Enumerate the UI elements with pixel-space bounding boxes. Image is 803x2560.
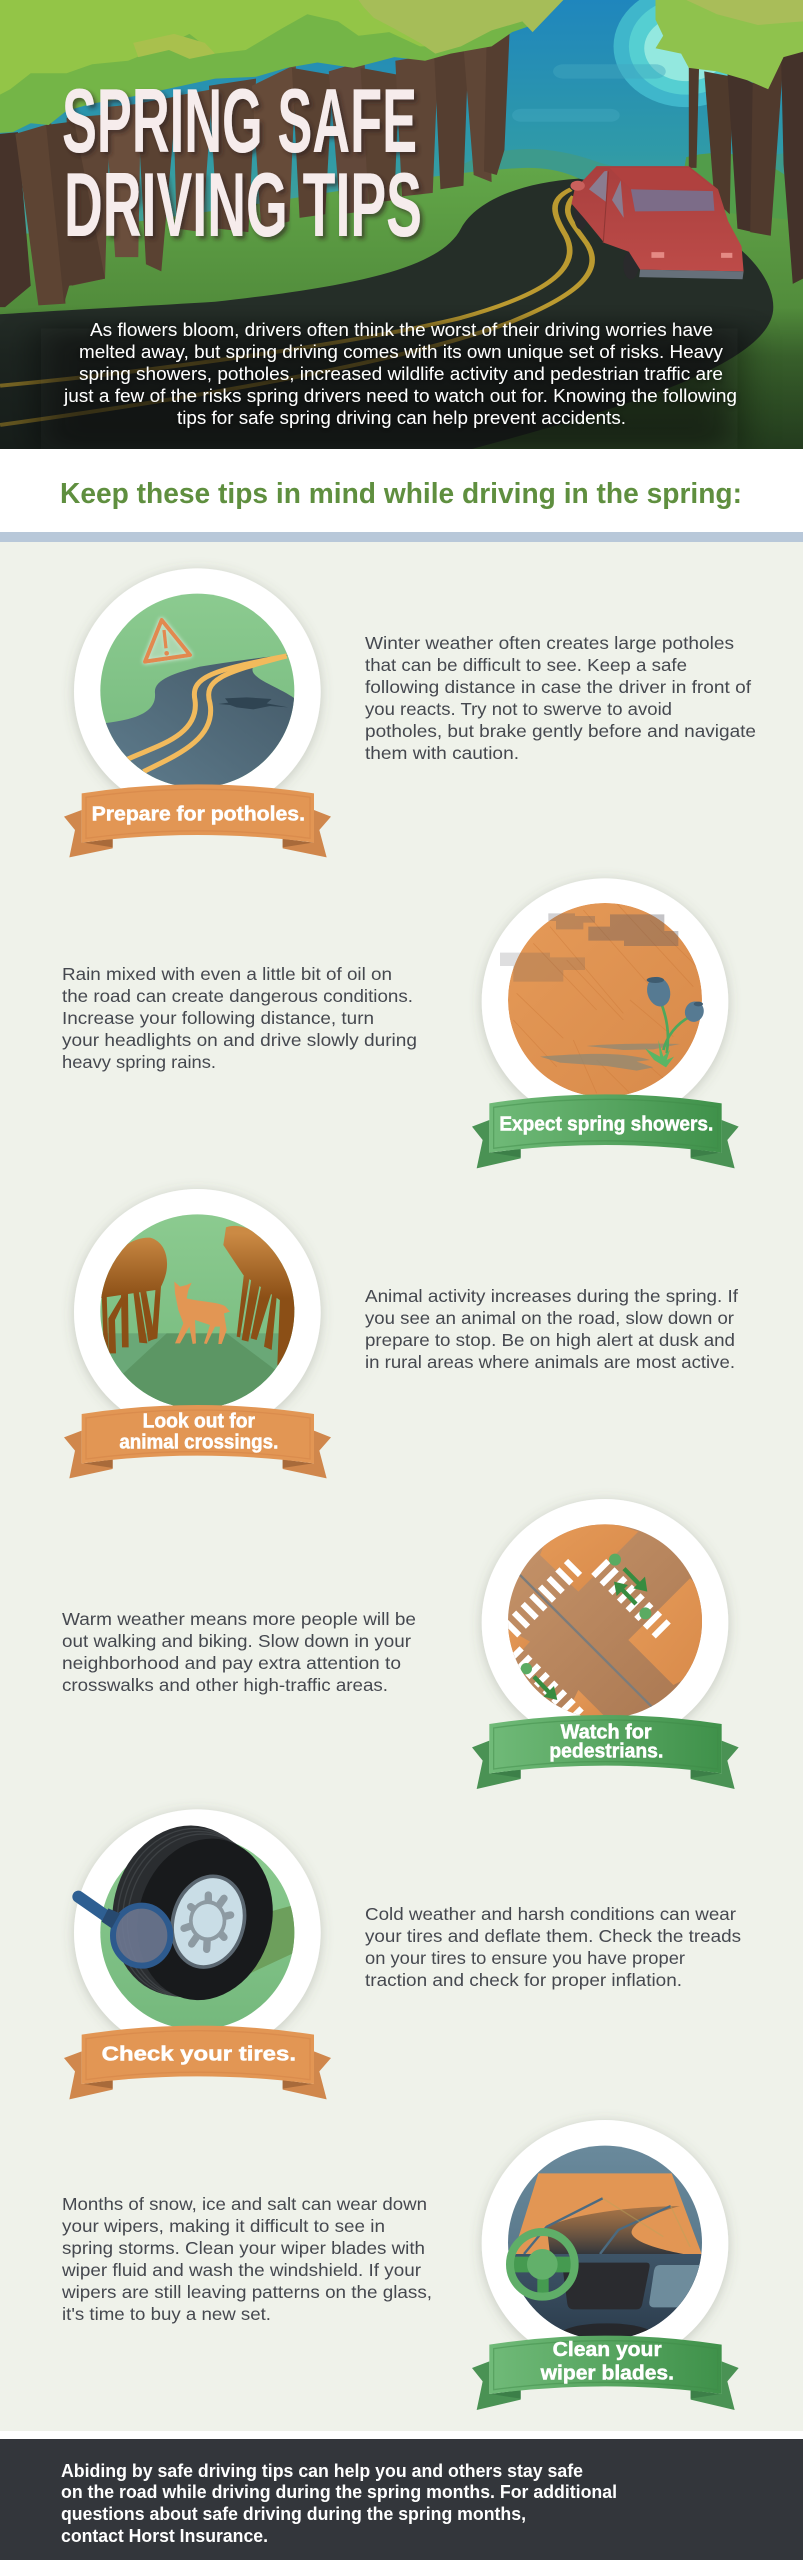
road scene bbox=[97, 590, 300, 793]
tip 6 text: wiper fluid and wash the windshield. If your bbox=[61, 2260, 421, 2280]
rear window bbox=[631, 189, 714, 211]
footer text bbox=[61, 2461, 617, 2546]
right tree bbox=[223, 1226, 298, 1368]
tip 4 text: crosswalks and other high-traffic areas. bbox=[62, 1675, 388, 1695]
intro paragraph: As flowers bloom, drivers often think the worst of their driving worries have bbox=[90, 320, 713, 340]
vent panel bbox=[649, 2265, 708, 2307]
tail lights bbox=[651, 252, 664, 258]
ribbon bbox=[64, 2026, 331, 2099]
moon bbox=[614, 0, 728, 107]
white ring bbox=[482, 878, 728, 1125]
ribbon bbox=[472, 1094, 739, 1168]
dark overlay behind intro bbox=[0, 307, 803, 449]
subheading band bbox=[0, 449, 803, 542]
ribbon bbox=[472, 1715, 739, 1789]
tip 4 text: neighborhood and pay extra attention to bbox=[62, 1653, 401, 1673]
white ring bbox=[482, 1499, 728, 1746]
door line bbox=[603, 171, 608, 243]
tip 6 text: it's time to buy a new set. bbox=[62, 2304, 271, 2324]
tip 3 text: Animal activity increases during the spring. If bbox=[365, 1286, 738, 1306]
right hill bbox=[684, 153, 788, 220]
white ring bbox=[74, 1189, 321, 1436]
ribbon label: Prepare for potholes. bbox=[92, 804, 305, 826]
crosswalk scene bbox=[508, 1524, 702, 1716]
car body bbox=[572, 166, 744, 271]
hub bbox=[162, 1868, 254, 1975]
steering wheel bbox=[510, 2232, 575, 2297]
deer bbox=[174, 1282, 230, 1344]
crosswalk stripes bbox=[505, 1561, 669, 1718]
background scene bbox=[97, 1830, 300, 2033]
tip 6 text: your wipers, making it difficult to see in bbox=[62, 2216, 385, 2236]
title bbox=[62, 71, 422, 256]
tip 3 text: in rural areas where animals are most active. bbox=[365, 1352, 735, 1372]
side windows bbox=[589, 171, 607, 202]
footer panel bbox=[0, 2439, 803, 2560]
console bbox=[560, 2323, 653, 2347]
tip 6: wiper medallion bbox=[472, 2120, 739, 2410]
clouds bbox=[500, 913, 678, 982]
mirror bbox=[571, 181, 585, 191]
tip 1 text bbox=[365, 633, 756, 763]
title: DRIVING TIPS bbox=[64, 155, 422, 256]
canopy: right trees bbox=[656, 0, 803, 89]
rain scene bbox=[508, 903, 702, 1097]
tip 4 text: Warm weather means more people will be bbox=[62, 1609, 416, 1629]
arrow bbox=[614, 1582, 636, 1604]
tip 3: animal crossings medallion bbox=[64, 1189, 331, 1478]
warning triangle icon bbox=[145, 620, 190, 662]
pedestrian dot bbox=[521, 1663, 532, 1674]
subheading: Keep these tips in mind while driving in the spring: bbox=[60, 478, 742, 510]
dashboard bbox=[505, 2254, 708, 2347]
ribbon label: animal crossings. bbox=[119, 1431, 278, 1453]
pedestrian dot bbox=[609, 1554, 621, 1566]
ground bbox=[102, 1333, 292, 1406]
tip 3 text: prepare to stop. Be on high alert at dusk and bbox=[365, 1330, 735, 1350]
tire bbox=[95, 1810, 291, 2015]
puddle bbox=[540, 1044, 680, 1071]
tip 2: spring showers medallion bbox=[472, 878, 739, 1168]
distant hills bbox=[464, 149, 784, 180]
footer text: Abiding by safe driving tips can help you and others stay safe bbox=[61, 2461, 583, 2481]
ribbon bbox=[472, 2336, 739, 2410]
ribbon label: Clean your bbox=[553, 2339, 662, 2361]
tip 1 text: them with caution. bbox=[365, 743, 519, 763]
canopy: olive layer bbox=[358, 0, 563, 54]
footer text: on the road while driving during the spring months. For additional bbox=[61, 2482, 617, 2502]
tip 1 text: following distance in case the driver in front of bbox=[365, 677, 751, 697]
white band above footer bbox=[0, 2431, 803, 2439]
red car bbox=[571, 166, 744, 279]
hub spokes bbox=[184, 1895, 231, 1949]
tip 5 text: Cold weather and harsh conditions can wear bbox=[365, 1904, 736, 1924]
white ring bbox=[74, 1809, 321, 2056]
tip 4 text bbox=[62, 1609, 416, 1695]
dashboard scene bbox=[505, 2143, 708, 2347]
sky bbox=[0, 0, 803, 250]
tip 5 text: traction and check for proper inflation. bbox=[365, 1970, 682, 1990]
ground bbox=[0, 168, 803, 449]
ribbon label: wiper blades. bbox=[540, 2362, 674, 2384]
tip 1: potholes medallion bbox=[64, 568, 331, 857]
arrow bbox=[534, 1677, 552, 1695]
tip 4 text: out walking and biking. Slow down in your bbox=[62, 1631, 411, 1651]
tip 1 text: that can be difficult to see. Keep a safe bbox=[365, 655, 687, 675]
tip 2 text: Increase your following distance, turn bbox=[62, 1008, 374, 1028]
wipers bbox=[524, 2198, 603, 2254]
tip 2 text bbox=[62, 964, 417, 1072]
pedestrian dot bbox=[639, 1607, 651, 1619]
ribbon label: Check your tires. bbox=[102, 2044, 296, 2066]
car roof highlight bbox=[609, 168, 714, 189]
road bbox=[0, 179, 773, 449]
forest scene bbox=[97, 1210, 300, 1413]
tree trunks: right bbox=[689, 46, 803, 284]
ribbon label bbox=[549, 1721, 663, 1762]
tip 1 text: potholes, but brake gently before and navigate bbox=[365, 721, 756, 741]
intro paragraph: just a few of the risks spring drivers need to watch out for. Knowing the following bbox=[63, 386, 737, 406]
wiped area bbox=[547, 2206, 683, 2254]
intro paragraph: spring showers, potholes, increased wildlife activity and pedestrian traffic are bbox=[79, 364, 723, 384]
title: SPRING SAFE bbox=[62, 71, 417, 172]
ribbon label: Watch for bbox=[561, 1721, 652, 1743]
tip 2 text: Rain mixed with even a little bit of oil on bbox=[62, 964, 392, 984]
white ring bbox=[482, 2120, 728, 2367]
tip 6 text bbox=[61, 2194, 432, 2324]
canopy: bright lime layer bbox=[0, 0, 425, 94]
intro paragraph: tips for safe spring driving can help prevent accidents. bbox=[177, 408, 626, 428]
tip 6 text: Months of snow, ice and salt can wear down bbox=[62, 2194, 427, 2214]
canopy: lower green layer bbox=[0, 0, 563, 133]
tip 5: tires medallion bbox=[64, 1809, 331, 2099]
footer text: contact Horst Insurance. bbox=[61, 2526, 268, 2546]
tip 4: pedestrians medallion bbox=[472, 1499, 739, 1789]
windshield bbox=[513, 2173, 702, 2254]
tip 1 text: Winter weather often creates large potholes bbox=[365, 633, 734, 653]
ribbon label bbox=[119, 1410, 278, 1453]
ribbon label: pedestrians. bbox=[549, 1740, 663, 1762]
intro paragraph: melted away, but spring driving comes with its own unique set of risks. Heavy bbox=[79, 342, 723, 362]
left tree bbox=[98, 1238, 167, 1353]
ribbon bbox=[64, 1405, 331, 1478]
tip 2 text: your headlights on and drive slowly during bbox=[62, 1030, 417, 1050]
tip 2 text: the road can create dangerous conditions. bbox=[62, 986, 413, 1006]
footer text: questions about safe driving during the spring months, bbox=[61, 2504, 526, 2524]
tip 3 text bbox=[365, 1286, 738, 1372]
wheels bbox=[574, 222, 580, 230]
tulips bbox=[644, 974, 707, 1067]
white ring bbox=[74, 568, 321, 815]
tip 2 text: heavy spring rains. bbox=[62, 1052, 216, 1072]
tree trunks: left and centre bbox=[0, 32, 510, 307]
ribbon bbox=[64, 784, 331, 857]
sidewalks bbox=[505, 1520, 710, 1720]
tip 5 text: your tires and deflate them. Check the treads bbox=[365, 1926, 741, 1946]
tip 5 text bbox=[365, 1904, 741, 1990]
intro paragraph bbox=[63, 320, 737, 428]
bumper bbox=[639, 270, 744, 279]
tip 6 text: wipers are still leaving patterns on the glass, bbox=[61, 2282, 432, 2302]
hero illustration bbox=[0, 0, 803, 450]
tip 6 text: spring storms. Clean your wiper blades with bbox=[62, 2238, 425, 2258]
road centre line bbox=[520, 1575, 652, 1707]
tip 1 text: you reacts. Try not to swerve to avoid bbox=[365, 699, 672, 719]
double yellow centre line bbox=[0, 189, 592, 425]
display panel bbox=[563, 2263, 650, 2309]
clouds in sky bbox=[512, 64, 666, 122]
ribbon label: Expect spring showers. bbox=[499, 1114, 713, 1136]
tip 3 text: you see an animal on the road, slow down or bbox=[365, 1308, 734, 1328]
ribbon label: Look out for bbox=[143, 1410, 255, 1432]
magnifying glass bbox=[78, 1897, 170, 1966]
ribbon label bbox=[540, 2339, 674, 2384]
arrow bbox=[624, 1569, 647, 1592]
tip 5 text: on your tires to ensure you have proper bbox=[365, 1948, 685, 1968]
